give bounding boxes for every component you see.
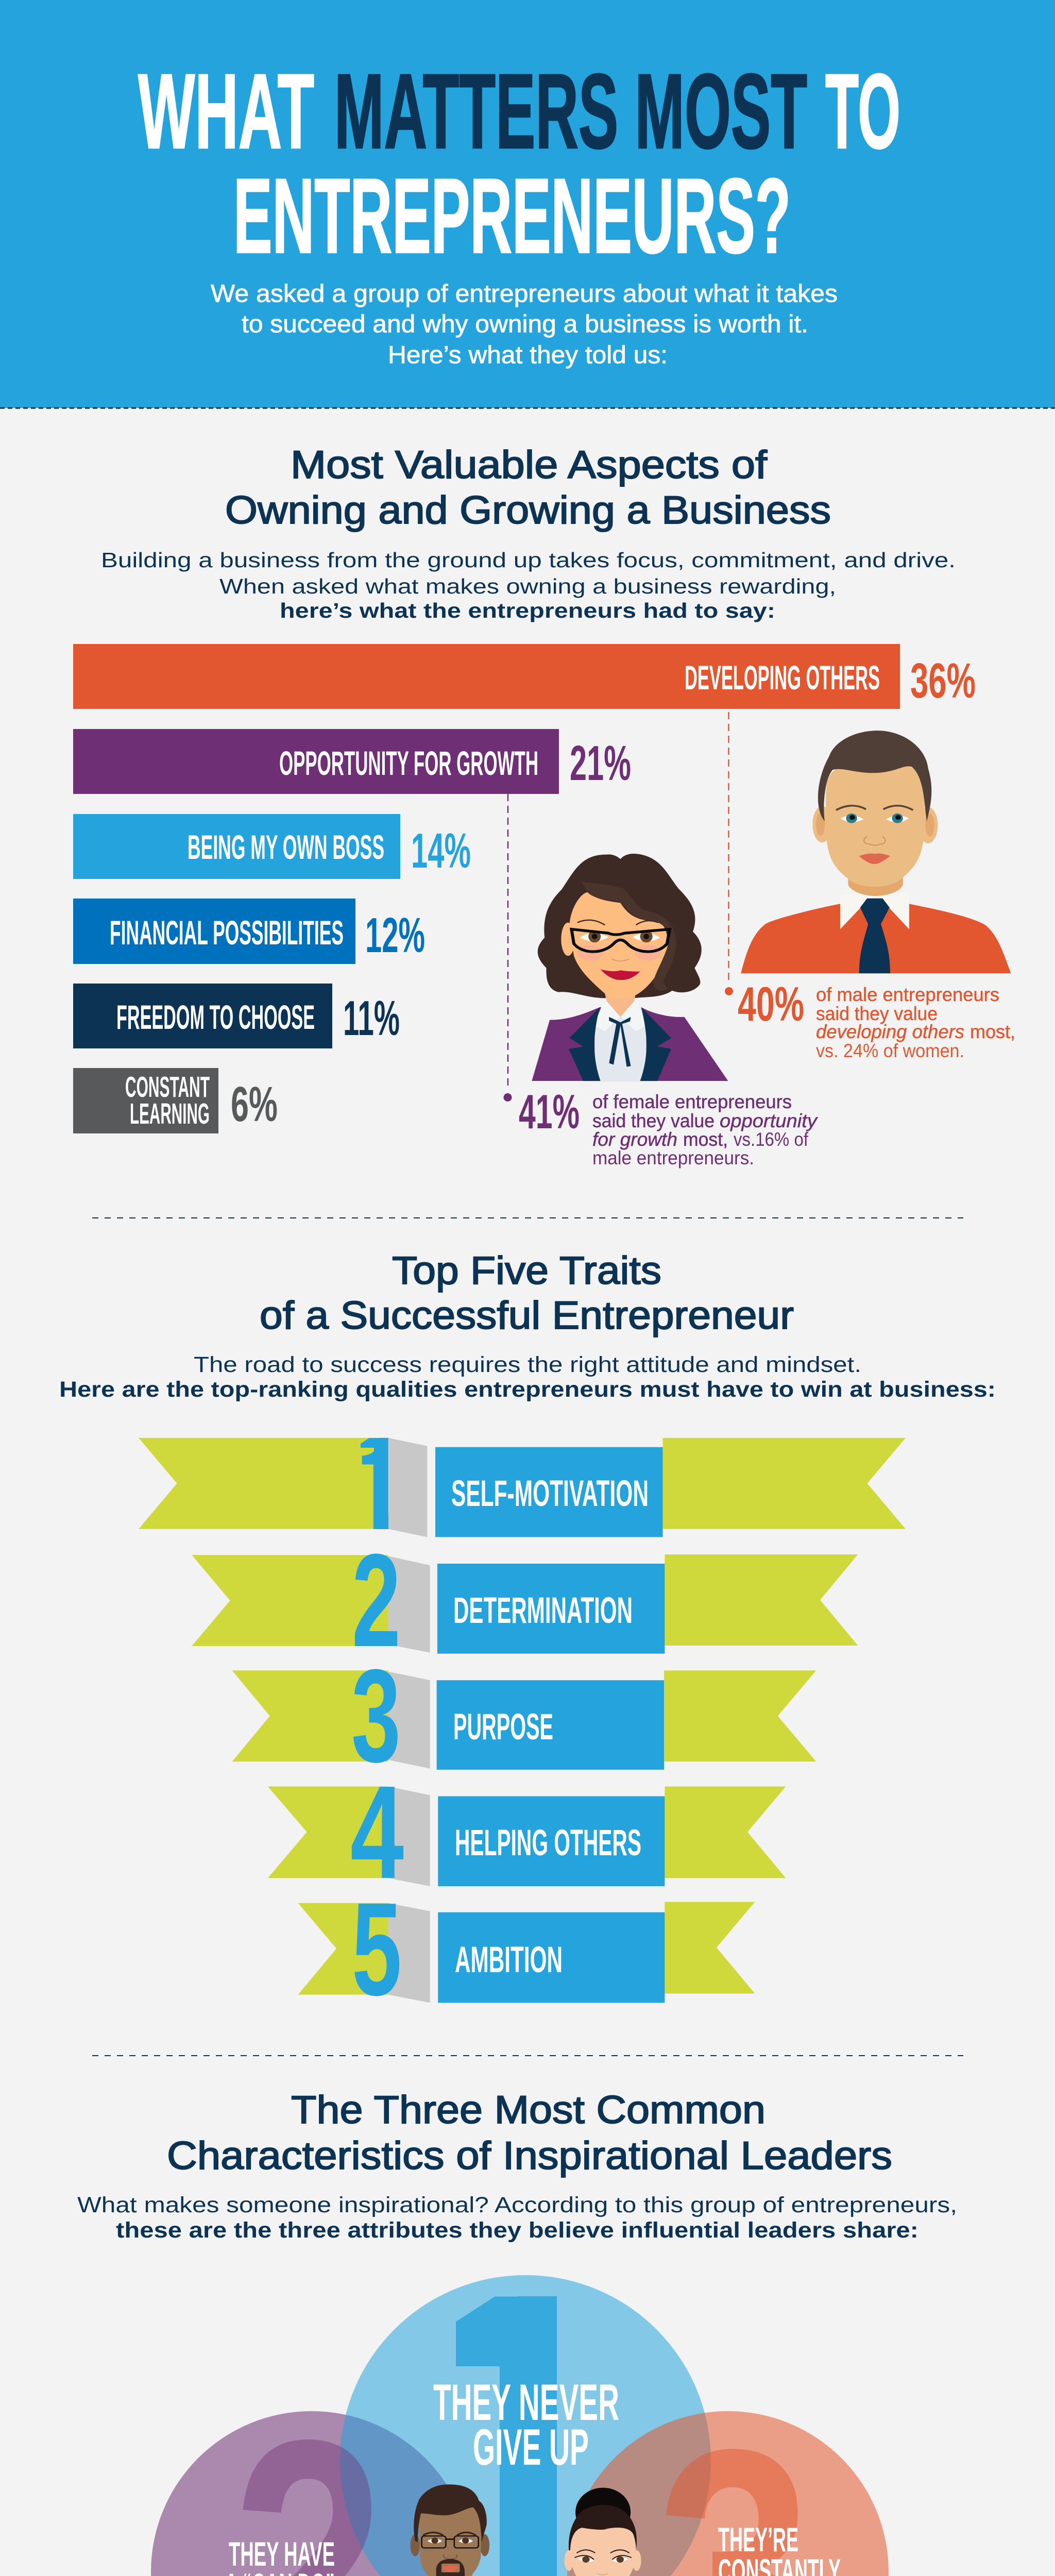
ribbon 5: ambition: AMBITION xyxy=(455,1940,563,1980)
ribbon 2: determination: DETERMINATION xyxy=(453,1590,633,1631)
bar: financial possibilities 12% xyxy=(73,899,425,964)
connector: orange dashed line xyxy=(725,712,733,995)
section 2 intro text: The road to success requires the right attitude and mindset. xyxy=(194,1352,861,1377)
circle: blue xyxy=(340,2275,711,2576)
section 1 intro text: here’s what the entrepreneurs had to say: xyxy=(280,599,775,622)
venn circles xyxy=(151,2275,889,2576)
ribbon 5: ambition xyxy=(298,1875,755,2023)
bar: opportunity for growth 21%: 21% xyxy=(570,736,631,791)
callout: 40% male: 40% xyxy=(738,977,804,1031)
callout: 41% female: said they value xyxy=(592,1110,714,1131)
bar: being my own boss 14%: BEING MY OWN BOSS xyxy=(188,828,384,866)
section 2 intro text: Here are the top-ranking qualities entrepreneurs must have to win at business: xyxy=(59,1377,996,1402)
section 3 intro text: these are the three attributes they believe influential leaders share: xyxy=(116,2218,918,2243)
bar: developing others 36%: 36% xyxy=(910,653,976,708)
callout: 41% female: male entrepreneurs. xyxy=(592,1147,754,1168)
panel: header xyxy=(0,0,1055,408)
callout: 41% female: opportunity xyxy=(720,1110,819,1131)
heading: three characteristics: The Three Most Common xyxy=(291,2088,765,2132)
heading: most valuable aspects: Most Valuable Aspects of xyxy=(291,443,768,487)
bar: opportunity for growth 21%: OPPORTUNITY FOR GROWTH xyxy=(279,744,538,782)
ribbon 1: self-motivation: SELF-MOTIVATION xyxy=(451,1473,649,1514)
ribbon 4: helping others: HELPING OTHERS xyxy=(455,1823,641,1863)
bar: being my own boss 14% xyxy=(73,814,471,879)
bar: freedom to choose 11%: 11% xyxy=(343,991,400,1046)
callout: 40% male: of male entrepreneurs xyxy=(816,984,999,1005)
bar: developing others 36%: DEVELOPING OTHERS xyxy=(685,658,880,697)
ribbon 3: purpose xyxy=(232,1642,816,1790)
callout: 41% female: most, xyxy=(683,1129,728,1150)
ribbon 5: ambition: 5 xyxy=(352,1875,402,2023)
bar: freedom to choose 11%: FREEDOM TO CHOOSE xyxy=(116,998,315,1036)
circle: orange xyxy=(567,2411,889,2576)
title: TO xyxy=(825,52,900,171)
ribbon 1: self-motivation: 1 xyxy=(337,1410,411,1557)
ribbon 3: purpose: 3 xyxy=(351,1642,401,1790)
ribbon 2: determination: 2 xyxy=(352,1527,401,1674)
ribbon 3: purpose: PURPOSE xyxy=(453,1707,553,1748)
bar: constant learning 6%: CONSTANT xyxy=(125,1071,210,1104)
ribbon 4: helping others: 4 xyxy=(350,1758,404,1906)
illustration: businesswoman xyxy=(518,2488,704,2576)
bar: constant learning 6% xyxy=(73,1068,278,1133)
section 1 intro text: Building a business from the ground up takes focus, commitment, and drive. xyxy=(101,548,956,572)
callout: 41% female: of female entrepreneurs xyxy=(592,1091,792,1112)
callout: 40% male: vs. 24% of women. xyxy=(816,1040,964,1061)
numeral 1 xyxy=(456,2296,557,2576)
callout: 40% male: developing others xyxy=(816,1021,964,1042)
illustration: businessman xyxy=(334,2484,543,2576)
section 3 intro text: What makes someone inspirational? According to this group of entrepreneurs, xyxy=(77,2193,957,2217)
intro text: Here’s what they told us: xyxy=(388,342,668,369)
callout: 40% male: said they value xyxy=(816,1003,938,1024)
bar: opportunity for growth 21% xyxy=(73,729,631,794)
callout: 40% male: most, xyxy=(970,1021,1015,1042)
illustration: male entrepreneur xyxy=(741,731,1011,973)
connector: purple dashed line xyxy=(504,794,512,1101)
ribbon 1: self-motivation xyxy=(139,1410,906,1557)
bar: being my own boss 14%: 14% xyxy=(411,823,471,878)
bar: financial possibilities 12%: 12% xyxy=(365,908,425,963)
intro text: to succeed and why owning a business is worth it. xyxy=(242,311,808,338)
text: they never give up: GIVE UP xyxy=(473,2418,589,2476)
callout: 41% female: vs.16% of xyxy=(734,1129,809,1150)
circle: purple xyxy=(151,2411,472,2576)
intro text: We asked a group of entrepreneurs about what it takes xyxy=(211,280,838,308)
callout: 41% female: for growth xyxy=(592,1129,677,1150)
callout: 41% female xyxy=(519,1084,819,1168)
bar: developing others 36% xyxy=(73,644,976,709)
heading: most valuable aspects: Owning and Growing a Business xyxy=(225,488,831,532)
bar: constant learning 6%: LEARNING xyxy=(130,1097,210,1130)
ribbon 4: helping others xyxy=(268,1758,786,1906)
illustration: female entrepreneur xyxy=(532,854,728,1081)
callout: 40% male xyxy=(738,977,1015,1061)
ribbon list: traits xyxy=(139,1410,906,2023)
bar: freedom to choose 11% xyxy=(73,984,400,1048)
bar chart: valuable aspects xyxy=(73,644,976,1133)
section 1 intro text: When asked what makes owning a business rewarding, xyxy=(219,574,836,598)
heading: top five traits: of a Successful Entrepreneur xyxy=(260,1294,794,1337)
text: they never give up: THEY NEVER xyxy=(433,2374,619,2431)
bar: financial possibilities 12%: FINANCIAL POSSIBILITIES xyxy=(110,913,344,952)
bar: constant learning 6%: 6% xyxy=(231,1077,278,1132)
heading: three characteristics: Characteristics of Inspirational Leaders xyxy=(167,2134,892,2178)
heading: top five traits: Top Five Traits xyxy=(392,1249,661,1293)
text: can do attitude: THEY HAVE xyxy=(229,2535,335,2573)
ribbon 2: determination xyxy=(192,1527,858,1674)
title: WHAT xyxy=(138,52,314,171)
callout: 41% female: 41% xyxy=(519,1084,580,1139)
text: constantly improving: THEY’RE xyxy=(718,2520,798,2558)
